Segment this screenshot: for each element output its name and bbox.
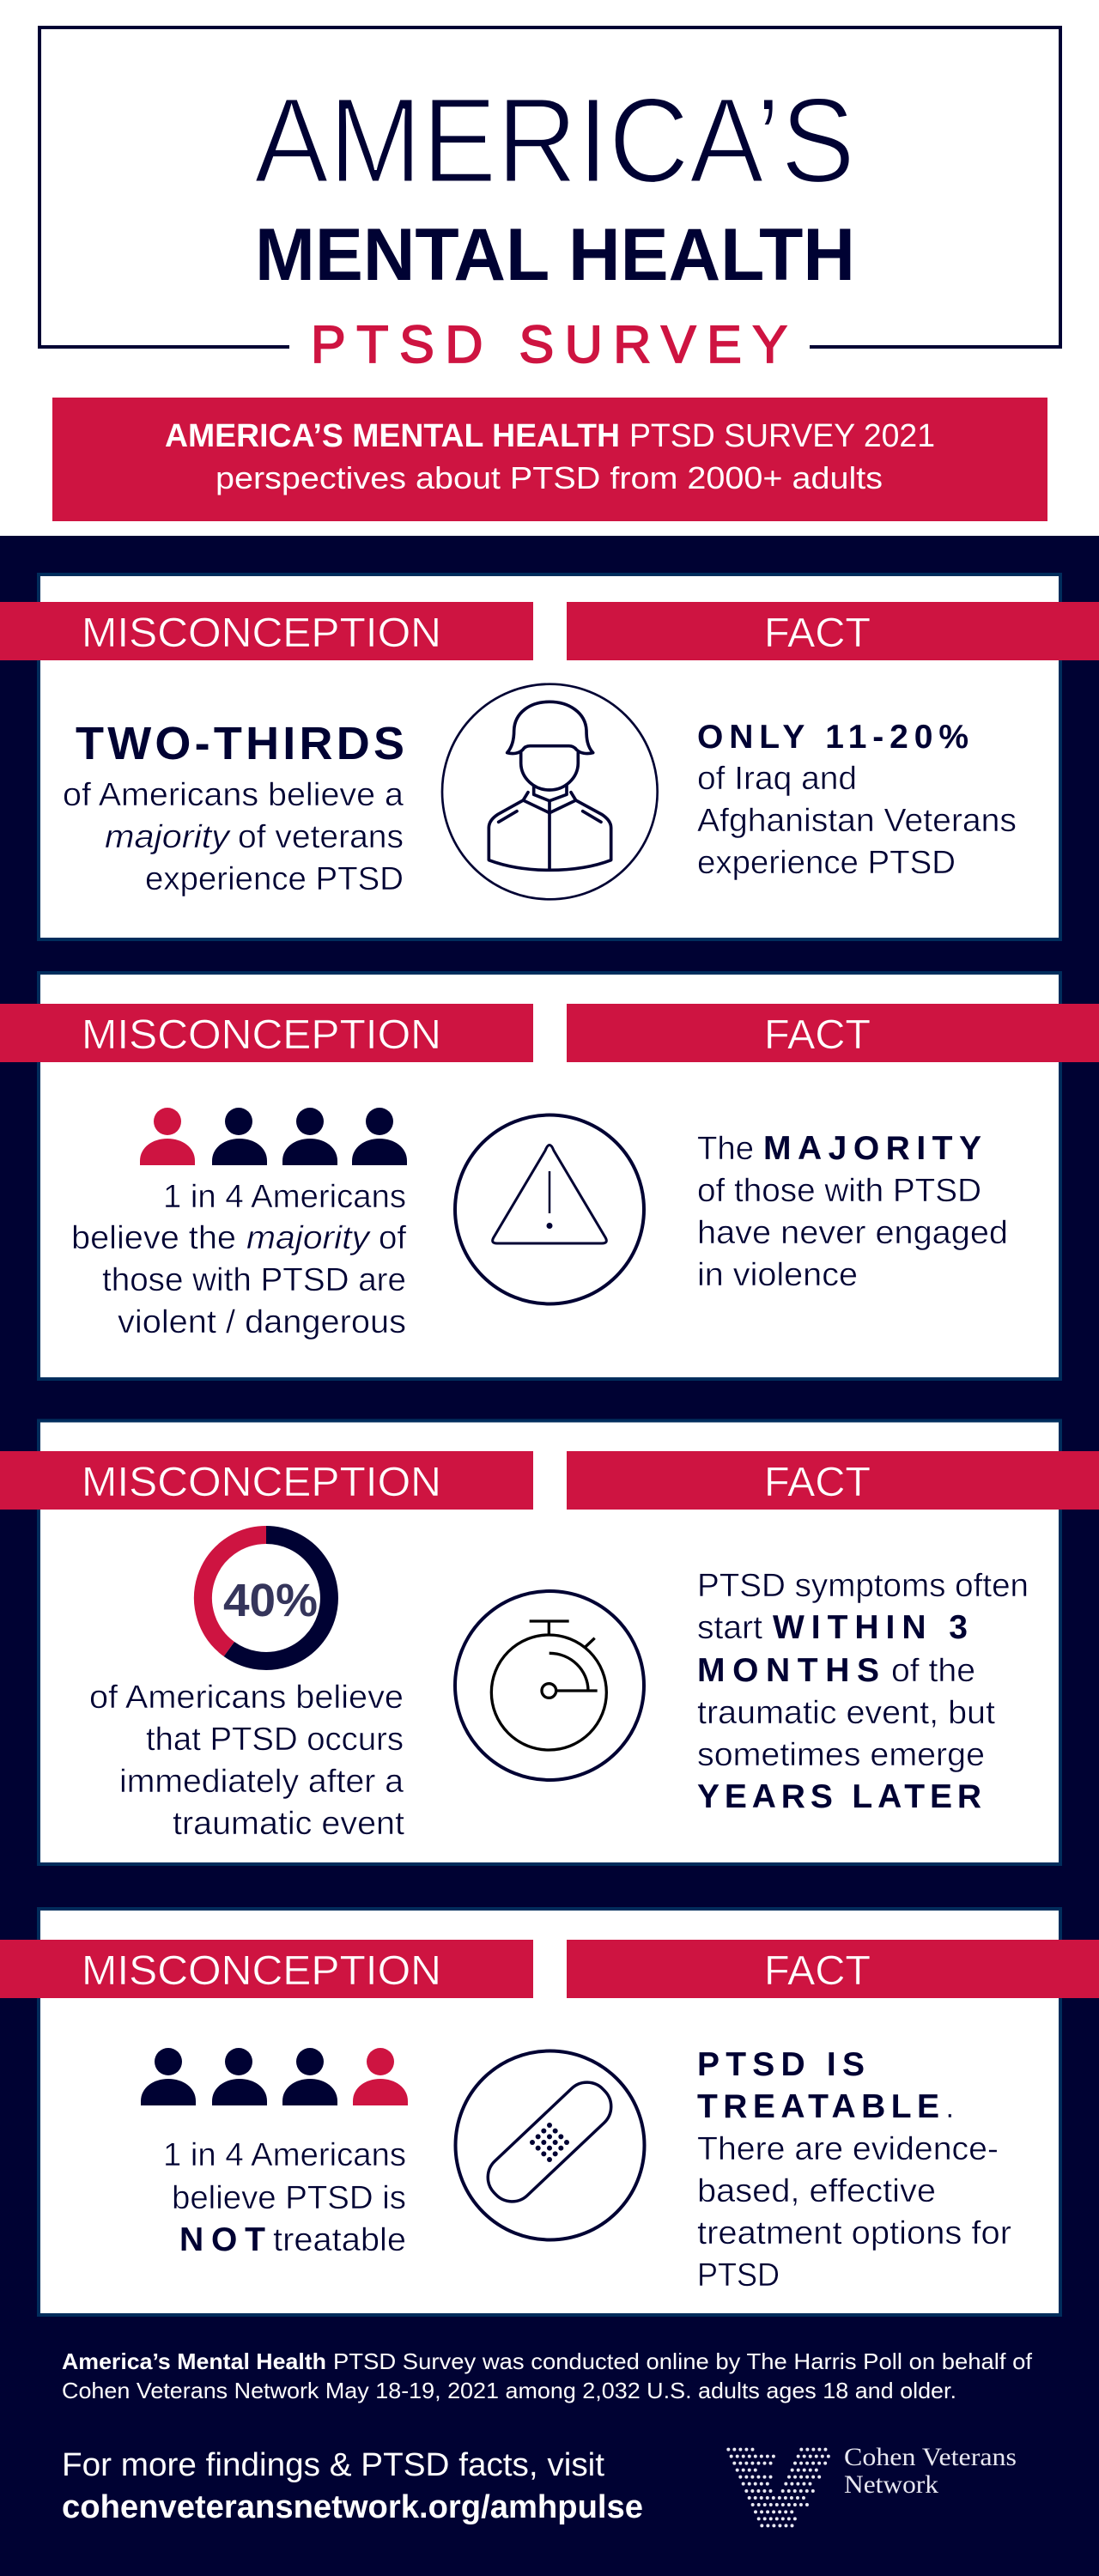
- title line: Mental Health: MENTAL HEALTH: [255, 214, 855, 296]
- fact text: of those with PTSD: [697, 1173, 981, 1209]
- title: [254, 72, 855, 374]
- fact text: PTSD symptoms often: [697, 1568, 1029, 1604]
- fact text: Afghanistan Veterans: [697, 803, 1017, 839]
- survey methodology note: Cohen Veterans Network May 18-19, 2021 among 2,032 U.S. adults ages 18 and older.: [62, 2378, 956, 2403]
- logo wordmark: Cohen Veterans: [844, 2443, 1017, 2471]
- misconception header band: MISCONCEPTION: [82, 1948, 441, 1994]
- misconception text: majority: [105, 819, 231, 855]
- fact text: PTSD IS: [697, 2046, 865, 2083]
- background: navy lower section: [0, 536, 1099, 2576]
- icon: four people, first highlighted: [140, 1108, 407, 1165]
- fact text: of Iraq and: [697, 761, 857, 797]
- misconception text: violent / dangerous: [118, 1304, 406, 1340]
- misconception text: TWO-THIRDS: [76, 718, 404, 769]
- misconception text: of Americans believe: [89, 1680, 404, 1716]
- fact text: .: [945, 2089, 955, 2125]
- misconception header band: [0, 602, 533, 660]
- fact header band: [567, 1940, 1099, 1998]
- fact text: start: [697, 1610, 762, 1646]
- icon: warning triangle: [455, 1115, 644, 1303]
- misconception text: of: [379, 1220, 406, 1256]
- fact header band: FACT: [764, 1012, 871, 1058]
- misconception text: 1 in 4 Americans: [163, 2137, 406, 2173]
- fact text: sometimes emerge: [697, 1737, 985, 1773]
- fact text: There are evidence-: [697, 2131, 999, 2167]
- fact text: MAJORITY: [763, 1130, 981, 1167]
- fact header band: [567, 1004, 1099, 1062]
- misconception text: traumatic event: [173, 1806, 404, 1842]
- fact text: [697, 2046, 1011, 2293]
- fact header band: [567, 602, 1099, 660]
- fact text: YEARS LATER: [697, 1778, 981, 1815]
- misconception header band: MISCONCEPTION: [82, 1012, 441, 1058]
- icon: four people, last highlighted: [141, 2048, 408, 2105]
- fact text: have never engaged: [697, 1215, 1008, 1251]
- fact text: TREATABLE: [697, 2088, 939, 2125]
- call to action: For more findings & PTSD facts, visit: [62, 2447, 604, 2483]
- header frame: [39, 27, 1060, 347]
- icon: stopwatch: [455, 1591, 644, 1780]
- panel: two-thirds veterans: [0, 574, 1099, 939]
- survey methodology note: PTSD Survey was conducted online by The Harris Poll on behalf of: [333, 2348, 1033, 2374]
- panel: timing of symptoms: [0, 1420, 1099, 1864]
- donut chart: 40%: [203, 1535, 329, 1661]
- survey methodology note: America’s Mental Health: [62, 2348, 326, 2374]
- icon: soldier: [442, 684, 658, 899]
- fact text: WITHIN 3: [773, 1609, 968, 1646]
- misconception text: believe the: [71, 1220, 236, 1256]
- subtitle banner: perspectives about PTSD from 2000+ adults: [216, 460, 883, 495]
- fact text: based, effective: [697, 2173, 936, 2209]
- fact text: ONLY 11-20%: [697, 719, 968, 756]
- fact text: traumatic event, but: [697, 1695, 995, 1731]
- subtitle banner: PTSD SURVEY 2021: [629, 418, 935, 454]
- fact text: MONTHS: [697, 1652, 879, 1689]
- fact header band: FACT: [764, 611, 871, 656]
- title line: PTSD Survey: PTSD SURVEY: [311, 315, 787, 374]
- misconception text: treatable: [273, 2222, 406, 2258]
- misconception header band: MISCONCEPTION: [82, 611, 441, 656]
- misconception text: [89, 1680, 404, 1842]
- fact text: PTSD: [697, 2257, 780, 2293]
- misconception text: those with PTSD are: [102, 1262, 406, 1298]
- fact header band: FACT: [764, 1948, 871, 1994]
- call to action: [62, 2447, 643, 2525]
- fact header band: FACT: [764, 1460, 871, 1505]
- misconception text: 1 in 4 Americans: [163, 1179, 406, 1215]
- misconception text: [163, 2137, 406, 2258]
- misconception text: that PTSD occurs: [146, 1722, 404, 1758]
- survey methodology note: [62, 2348, 1033, 2403]
- fact text: [697, 1130, 1008, 1293]
- misconception text: immediately after a: [119, 1764, 404, 1800]
- logo wordmark: [844, 2443, 1017, 2499]
- subtitle banner: [52, 398, 1047, 521]
- misconception header band: [0, 1004, 533, 1062]
- misconception text: [63, 718, 404, 897]
- fact text: of the: [891, 1653, 975, 1689]
- misconception text: experience PTSD: [145, 861, 404, 897]
- fact text: The: [697, 1131, 754, 1167]
- logo: Cohen Veterans Network: [728, 2443, 1017, 2525]
- misconception header band: [0, 1451, 533, 1510]
- donut chart: 40%: 40%: [223, 1575, 318, 1626]
- misconception header band: MISCONCEPTION: [82, 1460, 441, 1505]
- logo mark: starred V: [728, 2450, 829, 2525]
- fact text: experience PTSD: [697, 845, 956, 881]
- misconception text: [71, 1179, 406, 1340]
- fact text: [697, 719, 1017, 881]
- misconception text: of Americans believe a: [63, 777, 404, 813]
- misconception text: majority: [246, 1220, 371, 1256]
- misconception text: of veterans: [238, 819, 404, 855]
- call to action: cohenveteransnetwork.org/amhpulse: [62, 2489, 643, 2525]
- misconception header band: [0, 1940, 533, 1998]
- fact header band: [567, 1451, 1099, 1510]
- subtitle banner: AMERICA’S MENTAL HEALTH: [165, 418, 620, 454]
- fact text: [697, 1568, 1029, 1815]
- fact text: treatment options for: [697, 2215, 1011, 2251]
- icon: bandage: [455, 2050, 644, 2239]
- title line: America's: AMERICA’S: [254, 72, 855, 208]
- logo wordmark: Network: [844, 2470, 938, 2499]
- fact text: in violence: [697, 1257, 858, 1293]
- panel: violence: [0, 973, 1099, 1379]
- misconception text: believe PTSD is: [172, 2180, 406, 2216]
- misconception text: NOT: [179, 2221, 265, 2258]
- panel: treatability: [0, 1909, 1099, 2315]
